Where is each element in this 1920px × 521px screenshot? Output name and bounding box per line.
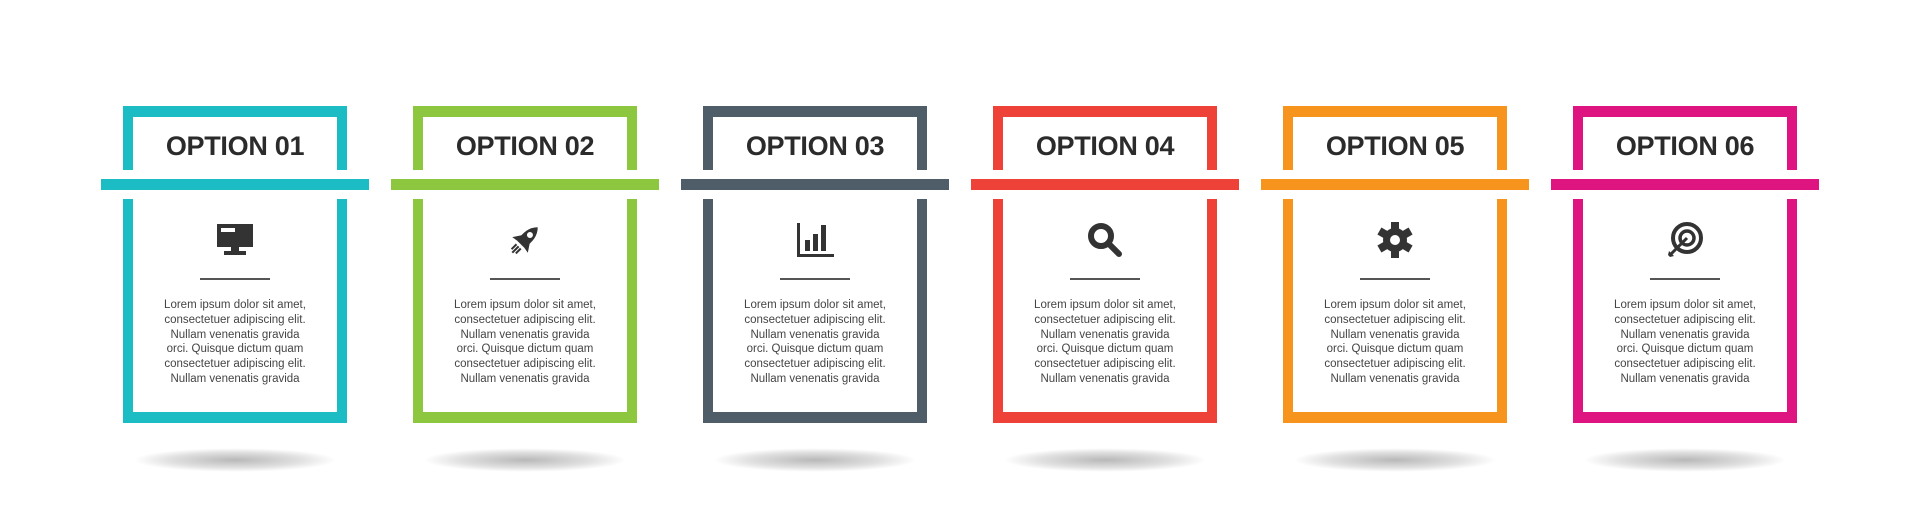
text block: consectetuer adipiscing elit. bbox=[1034, 358, 1176, 370]
text block bbox=[1034, 299, 1176, 385]
text block: Nullam venenatis gravida bbox=[1330, 373, 1460, 385]
heading: OPTION 06 bbox=[1616, 131, 1754, 161]
text block: Lorem ipsum dolor sit amet, bbox=[744, 299, 886, 311]
text block: Nullam venenatis gravida bbox=[1620, 373, 1750, 385]
text block: orci. Quisque dictum quam bbox=[167, 343, 303, 355]
text block bbox=[744, 299, 886, 385]
text block: orci. Quisque dictum quam bbox=[1617, 343, 1753, 355]
heading: OPTION 05 bbox=[1326, 131, 1464, 161]
panel: option 06 bbox=[1551, 106, 1819, 470]
text block: orci. Quisque dictum quam bbox=[1037, 343, 1173, 355]
text block: consectetuer adipiscing elit. bbox=[454, 358, 596, 370]
text block: orci. Quisque dictum quam bbox=[457, 343, 593, 355]
text block: Nullam venenatis gravida bbox=[460, 373, 590, 385]
text block bbox=[454, 299, 596, 385]
text block: consectetuer adipiscing elit. bbox=[454, 314, 596, 326]
text block: consectetuer adipiscing elit. bbox=[744, 314, 886, 326]
text block: Lorem ipsum dolor sit amet, bbox=[454, 299, 596, 311]
panel: option 04 bbox=[971, 106, 1239, 470]
text block: consectetuer adipiscing elit. bbox=[744, 358, 886, 370]
text block: Lorem ipsum dolor sit amet, bbox=[1614, 299, 1756, 311]
text block: Lorem ipsum dolor sit amet, bbox=[164, 299, 306, 311]
text block bbox=[1614, 299, 1756, 385]
text block: consectetuer adipiscing elit. bbox=[1324, 314, 1466, 326]
text block: Nullam venenatis gravida bbox=[1040, 373, 1170, 385]
text block: Nullam venenatis gravida bbox=[170, 329, 300, 341]
text block: Nullam venenatis gravida bbox=[1040, 329, 1170, 341]
text block: consectetuer adipiscing elit. bbox=[1324, 358, 1466, 370]
text block bbox=[1324, 299, 1466, 385]
text block: Nullam venenatis gravida bbox=[750, 329, 880, 341]
icon: monitor bbox=[217, 224, 253, 255]
text block: Nullam venenatis gravida bbox=[750, 373, 880, 385]
heading: OPTION 01 bbox=[166, 131, 304, 161]
text block: Lorem ipsum dolor sit amet, bbox=[1324, 299, 1466, 311]
panel: option 03 bbox=[681, 106, 949, 470]
text block: Lorem ipsum dolor sit amet, bbox=[1034, 299, 1176, 311]
text block: Nullam venenatis gravida bbox=[1620, 329, 1750, 341]
text block: consectetuer adipiscing elit. bbox=[1614, 314, 1756, 326]
text block: consectetuer adipiscing elit. bbox=[164, 358, 306, 370]
icon: gear bbox=[1378, 222, 1412, 258]
text block: consectetuer adipiscing elit. bbox=[1034, 314, 1176, 326]
icon: bar chart bbox=[797, 223, 834, 257]
panel: option 05 bbox=[1261, 106, 1529, 470]
text block: Nullam venenatis gravida bbox=[170, 373, 300, 385]
heading: OPTION 02 bbox=[456, 131, 594, 161]
text block bbox=[164, 299, 306, 385]
icon: target bbox=[1668, 222, 1703, 257]
panel: option 01 bbox=[101, 106, 369, 470]
text block: orci. Quisque dictum quam bbox=[1327, 343, 1463, 355]
heading: OPTION 04 bbox=[1036, 131, 1174, 161]
text block: orci. Quisque dictum quam bbox=[747, 343, 883, 355]
icon: rocket bbox=[510, 227, 538, 254]
panel: option 02 bbox=[391, 106, 659, 470]
text block: Nullam venenatis gravida bbox=[460, 329, 590, 341]
text block: consectetuer adipiscing elit. bbox=[1614, 358, 1756, 370]
text block: Nullam venenatis gravida bbox=[1330, 329, 1460, 341]
heading: OPTION 03 bbox=[746, 131, 884, 161]
icon: magnifier bbox=[1088, 223, 1122, 257]
text block: consectetuer adipiscing elit. bbox=[164, 314, 306, 326]
